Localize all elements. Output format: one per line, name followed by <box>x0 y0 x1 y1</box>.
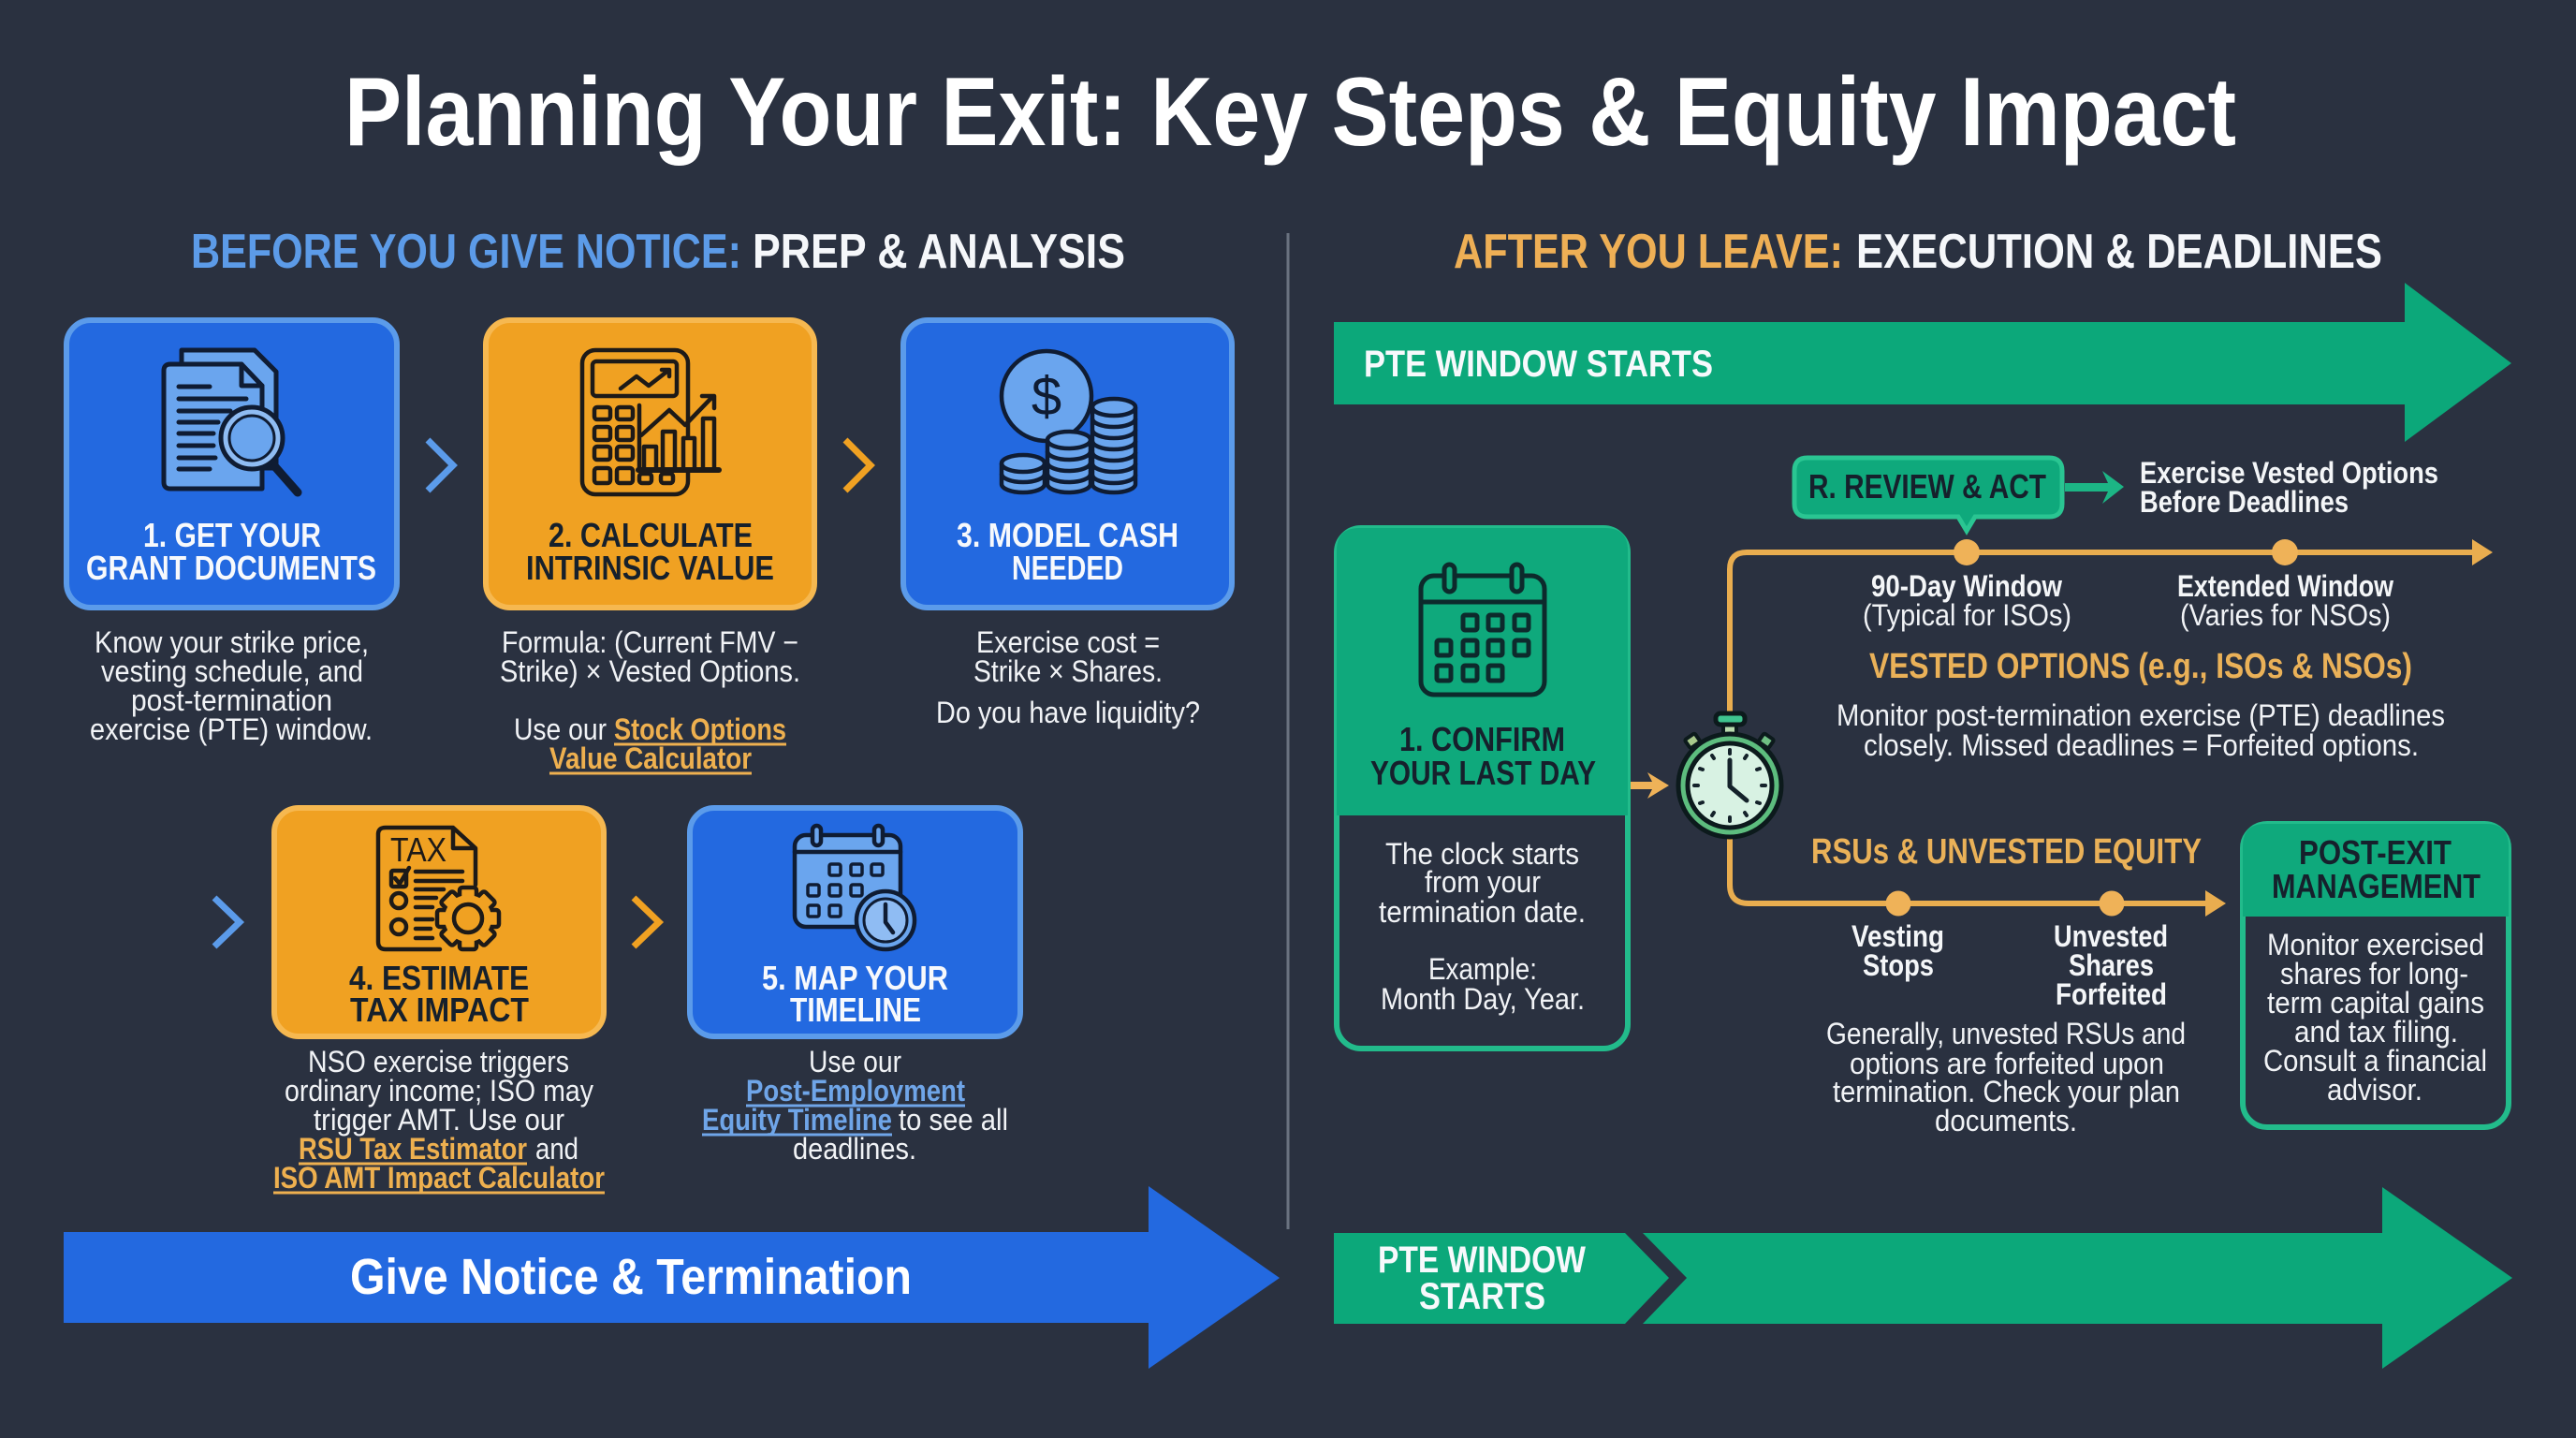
link: post-employment equity timeline: Post-Employment <box>746 1074 965 1108</box>
icon: calculator with chart <box>582 350 719 494</box>
text: step 3 description: Strike × Shares. <box>973 654 1163 688</box>
link: post-employment equity timeline <box>702 1074 965 1137</box>
step 2 title <box>526 516 774 587</box>
label: extended window <box>2177 569 2393 632</box>
text: step 2 description: Strike) × Vested Options. <box>500 654 800 688</box>
post-exit description: and tax filing. <box>2294 1015 2458 1049</box>
label: 90-day window: (Typical for ISOs) <box>1863 598 2071 632</box>
link: stock options value calculator <box>549 712 786 775</box>
text: step 1 description: Know your strike price, <box>95 625 369 659</box>
label: 90-day window <box>1863 569 2071 632</box>
text: unvested description: options are forfeited upon <box>1850 1047 2164 1080</box>
heading: after you leave: AFTER YOU LEAVE: <box>1454 225 1843 279</box>
arrow: PTE window starts (top) <box>1334 283 2511 442</box>
text: step 5 description: Use our <box>809 1045 901 1078</box>
icon: documents with magnifier <box>164 350 298 492</box>
step 2 title: 2. CALCULATE <box>549 516 753 554</box>
text: unvested description: documents. <box>1935 1104 2077 1137</box>
step 1 title: 1. GET YOUR <box>143 516 321 554</box>
label: vesting stops: Stops <box>1863 948 1934 982</box>
text: vested options description: Monitor post-termination exercise (PTE) deadlines <box>1837 698 2445 732</box>
heading: after you leave <box>1454 225 2382 279</box>
confirm description: from your <box>1425 865 1541 899</box>
text: step 2 description: Use our <box>514 712 607 746</box>
text: step 5 description: to see all <box>899 1103 1008 1137</box>
text: unvested description: Generally, unvested RSUs and <box>1826 1017 2186 1050</box>
text: step 4 description: NSO exercise triggers <box>308 1045 569 1078</box>
confirm description <box>1379 837 1586 1016</box>
label: 90-day window: 90-Day Window <box>1871 569 2062 603</box>
label: unvested shares forfeited: Forfeited <box>2056 977 2167 1011</box>
text: step 2 description: Formula: (Current FMV − <box>502 625 798 659</box>
arrow: PTE window starts (top): PTE WINDOW STARTS <box>1364 344 1713 385</box>
arrow: give notice and termination <box>64 1186 1280 1369</box>
text: step 4 description: trigger AMT. Use our <box>314 1103 564 1137</box>
step 4 title: TAX IMPACT <box>350 990 529 1029</box>
heading: rsus and unvested equity: RSUs & UNVESTED EQUITY <box>1811 832 2202 872</box>
icon: calendar <box>1421 565 1544 695</box>
link: iso amt impact calculator: ISO AMT Impact Calculator <box>273 1161 605 1195</box>
post-exit description: term capital gains <box>2267 986 2484 1020</box>
text: vested options description <box>1837 698 2445 762</box>
post-exit title <box>2272 833 2481 905</box>
post-exit title: MANAGEMENT <box>2272 867 2481 905</box>
step 5 title: 5. MAP YOUR <box>762 959 948 997</box>
panel: step 2 calculate intrinsic value <box>486 320 814 608</box>
icon: calendar with clock <box>795 826 915 949</box>
text: step 3 description: Do you have liquidity? <box>936 696 1200 729</box>
confirm description: The clock starts <box>1385 837 1579 871</box>
step 3 title: 3. MODEL CASH <box>957 516 1178 554</box>
arrow: review to exercise <box>2065 471 2124 504</box>
timeline: unvested equity <box>1730 838 2226 917</box>
arrow: PTE window starts (bottom) <box>1334 1187 2512 1369</box>
text: unvested description: termination. Check your plan <box>1833 1075 2180 1108</box>
arrow: give notice and termination: Give Notice & Termination <box>350 1249 912 1305</box>
link: stock options value calculator: Stock Options <box>614 712 786 746</box>
text: unvested description <box>1826 1017 2186 1137</box>
panel: confirm your last day <box>1337 528 1628 1049</box>
label: unvested shares forfeited: Shares <box>2069 948 2154 982</box>
confirm description: termination date. <box>1379 895 1586 929</box>
link: post-employment equity timeline: Equity Timeline <box>702 1103 892 1137</box>
label: extended window: Extended Window <box>2177 569 2393 603</box>
arrow: chevron 2 to 3 <box>845 440 871 491</box>
heading: vested options: VESTED OPTIONS (e.g., ISOs & NSOs) <box>1869 647 2412 686</box>
confirm title: 1. CONFIRM <box>1399 720 1565 758</box>
icon: dollar coin and stacks: $ <box>1032 366 1061 427</box>
post-exit description: shares for long- <box>2280 957 2468 990</box>
text: step 3 description <box>936 625 1200 729</box>
text: vested options description: closely. Missed deadlines = Forfeited options. <box>1864 728 2419 762</box>
confirm title <box>1370 720 1596 792</box>
heading: after you leave: EXECUTION & DEADLINES <box>1856 225 2382 279</box>
label: vesting stops: Vesting <box>1852 919 1944 953</box>
label: extended window: (Varies for NSOs) <box>2180 598 2391 632</box>
post-exit title: POST-EXIT <box>2299 833 2452 872</box>
step 2 title: INTRINSIC VALUE <box>526 549 774 587</box>
text: step 2 description <box>500 625 800 775</box>
text: step 5 description: deadlines. <box>793 1132 916 1166</box>
text: step 1 description: exercise (PTE) window. <box>90 712 373 746</box>
step 1 title <box>86 516 376 587</box>
link: stock options value calculator: Value Calculator <box>549 741 752 775</box>
callout: review and act: R. REVIEW & ACT <box>1808 467 2046 506</box>
post-exit description: Consult a financial <box>2263 1044 2487 1078</box>
panel: step 1 get your grant documents <box>66 320 397 608</box>
timeline: vested options <box>1730 539 2493 712</box>
step 5 title <box>762 959 948 1029</box>
icon: stopwatch <box>1678 713 1781 837</box>
panel: step 3 model cash needed <box>903 320 1232 608</box>
text: exercise vested options: Exercise Vested Options <box>2140 456 2438 490</box>
callout: review and act <box>1794 458 2062 531</box>
step 4 title <box>349 959 529 1029</box>
post-exit description: advisor. <box>2327 1073 2422 1107</box>
arrow: chevron into step 4 <box>214 898 240 946</box>
heading: before you give notice: BEFORE YOU GIVE NOTICE: <box>191 225 741 279</box>
text: step 1 description: post-termination <box>131 683 332 717</box>
step 1 title: GRANT DOCUMENTS <box>86 549 376 587</box>
step 3 title: NEEDED <box>1012 549 1123 587</box>
text: exercise vested options: Before Deadlines <box>2140 485 2349 519</box>
panel: step 4 estimate tax impact <box>274 808 604 1036</box>
arrow: chevron 1 to 2 <box>428 440 453 491</box>
heading: before you give notice: PREP & ANALYSIS <box>753 225 1125 279</box>
post-exit description: Monitor exercised <box>2267 928 2484 961</box>
panel: step 5 map your timeline <box>690 808 1020 1036</box>
arrow: PTE window starts (bottom): STARTS <box>1419 1276 1545 1317</box>
icon: tax form with gear: TAX <box>390 830 446 869</box>
text: step 4 description: ordinary income; ISO may <box>285 1074 593 1108</box>
label: unvested shares forfeited <box>2054 919 2168 1011</box>
text: step 4 description <box>273 1045 605 1195</box>
text: step 4 description: and <box>535 1132 578 1166</box>
panel: post-exit management <box>2243 824 2509 1127</box>
text: step 5 description <box>702 1045 1008 1166</box>
text: step 1 description: vesting schedule, and <box>101 654 363 688</box>
icon: dollar coin and stacks <box>1002 351 1135 492</box>
confirm description: Example: <box>1428 952 1537 986</box>
arrow: PTE window starts (bottom): PTE WINDOW <box>1378 1240 1586 1281</box>
confirm title: YOUR LAST DAY <box>1370 754 1596 792</box>
title: Planning Your Exit: Key Steps & Equity Impact <box>344 58 2236 167</box>
text: step 3 description: Exercise cost = <box>976 625 1160 659</box>
text: step 1 description <box>90 625 373 746</box>
step 3 title <box>957 516 1178 587</box>
label: unvested shares forfeited: Unvested <box>2054 919 2168 953</box>
arrow: last day to stopwatch <box>1631 772 1669 799</box>
link: rsu tax estimator: RSU Tax Estimator <box>299 1132 527 1166</box>
step 4 title: 4. ESTIMATE <box>349 959 529 997</box>
step 5 title: TIMELINE <box>790 990 921 1029</box>
label: vesting stops <box>1852 919 1944 982</box>
confirm description: Month Day, Year. <box>1381 982 1585 1016</box>
text: exercise vested options <box>2140 456 2438 519</box>
arrow: chevron 4 to 5 <box>634 898 659 946</box>
post-exit description <box>2263 928 2487 1107</box>
icon: tax form with gear <box>378 828 499 949</box>
